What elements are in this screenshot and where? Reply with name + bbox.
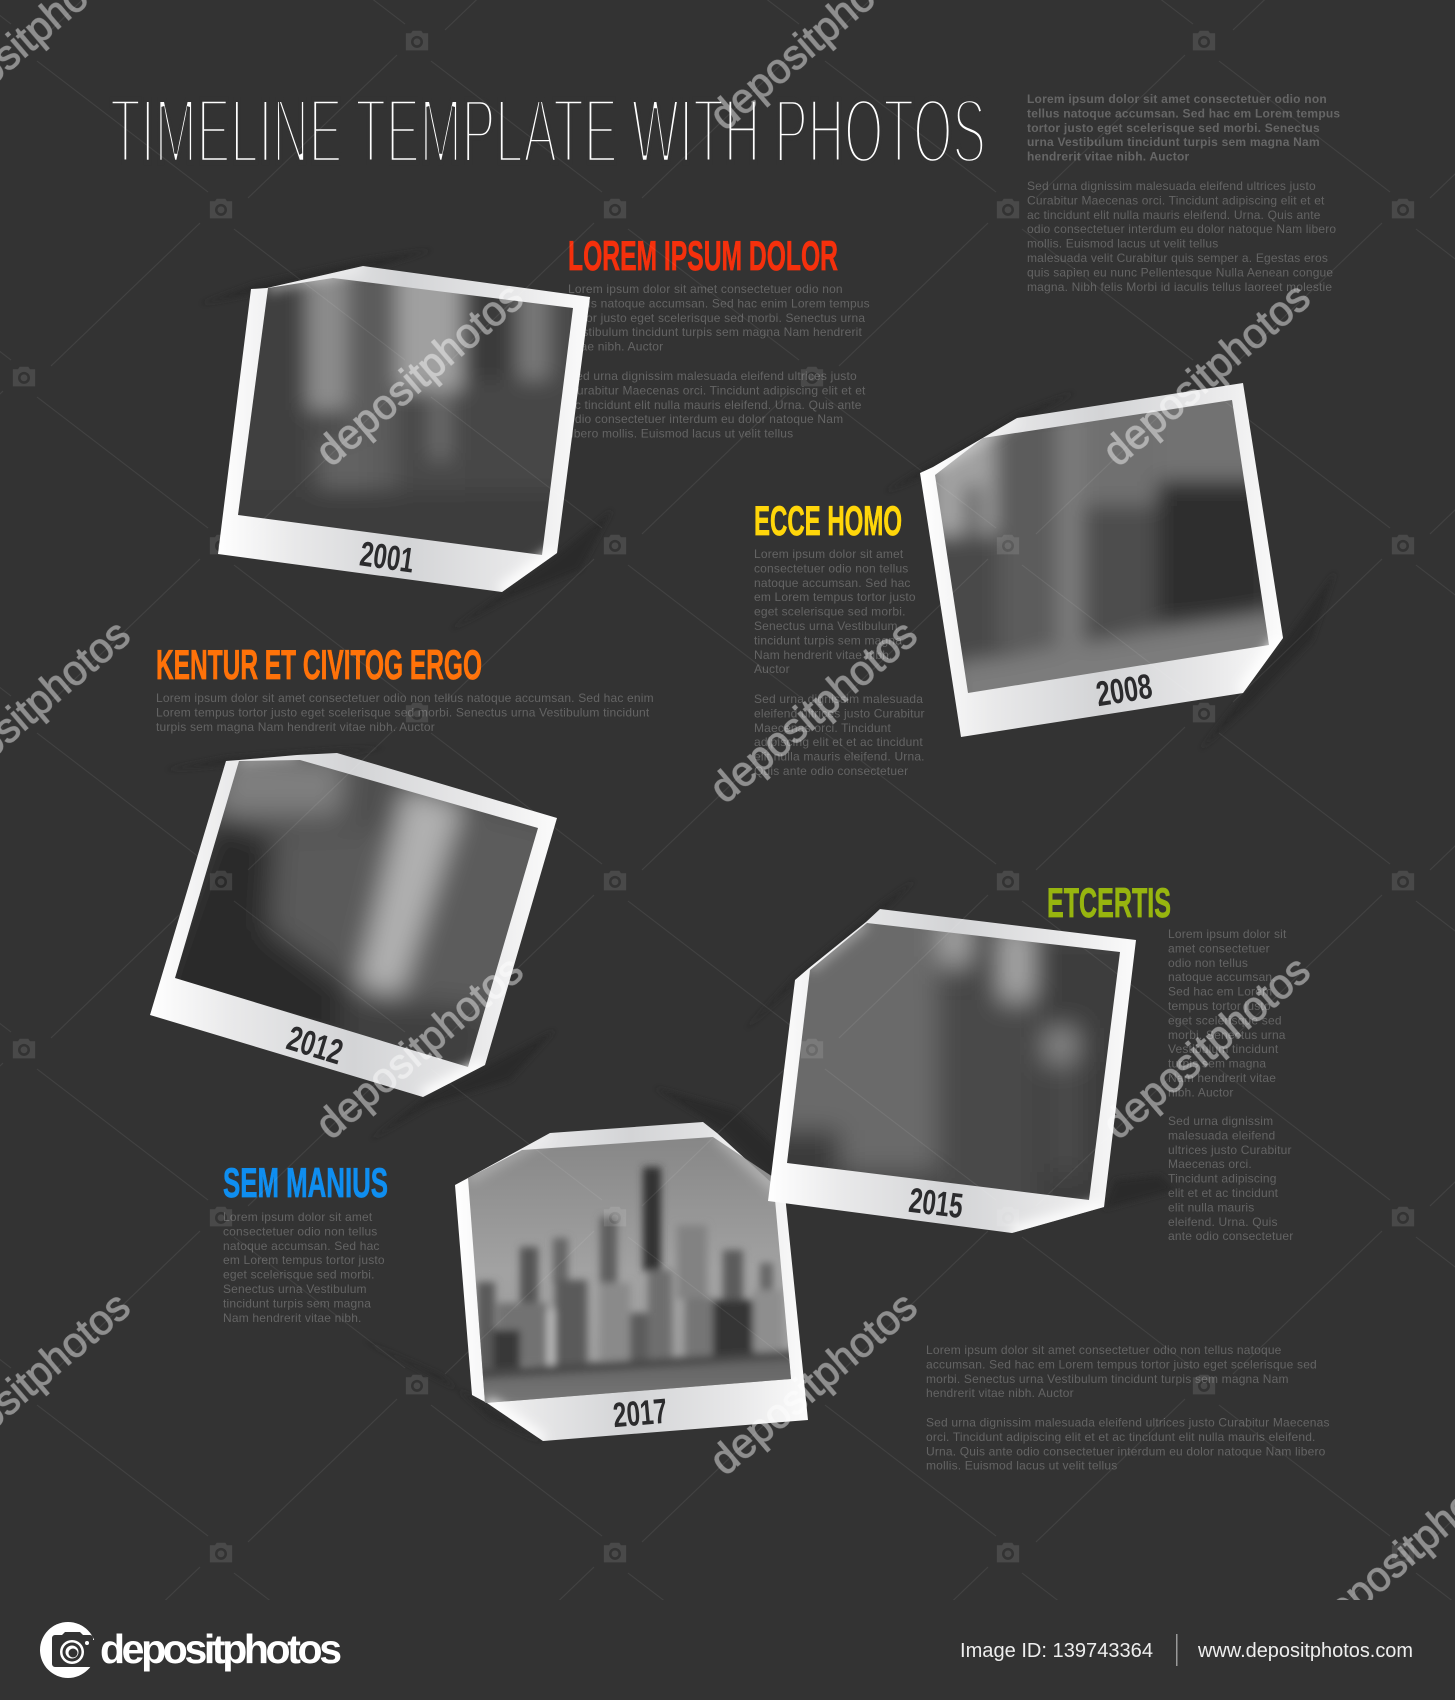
polaroid: 2015 [768,909,1136,1233]
text block: 2008: Auctor [754,662,790,676]
text block: 2017 right: morbi. Senectus urna Vestibulum tincidunt turpis sem magna Nam [926,1372,1289,1386]
watermark pattern: depositphotos [306,946,532,1148]
text block: 2008: eleifend ultrices justo Curabitur [754,706,925,720]
text block: 2008: Nam hendrerit vitae nibh. [754,648,893,662]
polaroid: 2017 [455,1122,808,1441]
watermark pattern: depositphotos [1093,946,1319,1148]
heading: kentur et civitog ergo: KENTUR ET CIVITOG ERGO [156,641,482,688]
text block: 2008: Sed urna dignissim malesuada [754,692,923,706]
text block: 2001 [568,282,870,441]
watermark pattern: depositphotos [306,273,532,475]
intro text block: quis sapien eu nunc Pellentesque Nulla Aenean congue [1027,265,1333,279]
year label: 2015 [907,1181,965,1226]
text block: 2001: Curabitur Maecenas orci. Tincidunt adipiscing elit et et [568,383,866,397]
text block: 2017 right: accumsan. Sed hac em Lorem tempus tortor justo eget scelerisque sed [926,1357,1317,1371]
intro text block: odio consectetuer interdum eu dolor natoque Nam libero [1027,222,1336,236]
text block: 2001: vitae nibh. Auctor [568,340,663,354]
text block: 2017 left: Senectus urna Vestibulum [223,1282,367,1296]
text block: 2015: natoque accumsan. [1168,970,1276,984]
paper slit shadows [165,250,1335,1443]
text block: 2015: odio non tellus [1168,956,1248,970]
text block: 2015: Vestibulum tincidunt [1168,1042,1279,1056]
text block: 2017 right: mollis. Euismod lacus ut velit tellus [926,1459,1117,1473]
text block: 2017 right: hendrerit vitae nibh. Auctor [926,1386,1074,1400]
text block: 2015: Nam hendrerit vitae [1168,1071,1276,1085]
text block: 2017 left: natoque accumsan. Sed hac [223,1239,380,1253]
text block: 2017 left: Lorem ipsum dolor sit amet [223,1210,373,1224]
text block: 2001: tortor justo eget scelerisque sed morbi. Senectus urna [568,311,865,325]
heading: ecce homo: ECCE HOMO [754,497,902,544]
text block: 2001: ac tincidunt elit nulla mauris eleifend. Urna. Quis ante [568,398,862,412]
text block: 2017 left: em Lorem tempus tortor justo [223,1253,385,1267]
text block: 2017 right: Urna. Quis ante odio consectetuer interdum eu dolor natoque Nam libero [926,1444,1326,1458]
text block: 2012: Lorem ipsum dolor sit amet consectetuer odio non tellus natoque accumsan. Sed hac enim [156,691,654,705]
text block: 2017 left: Nam hendrerit vitae nibh. [223,1311,362,1325]
intro text block: tortor justo eget scelerisque sed morbi. Senectus [1027,121,1320,135]
text block: 2015: Lorem ipsum dolor sit [1168,927,1287,941]
text block: 2008: eget scelerisque sed morbi. [754,605,906,619]
text block: 2008: consectetuer odio non tellus [754,561,908,575]
intro text block: urna Vestibulum tincidunt turpis sem magna Nam [1027,135,1320,149]
text block: 2008: Lorem ipsum dolor sit amet [754,547,904,561]
footer logo: depositphotos [100,1626,342,1672]
intro text block: Curabitur Maecenas orci. Tincidunt adipiscing elit et et [1027,193,1325,207]
intro text block: ac tincidunt elit nulla mauris eleifend. Urna. Quis ante [1027,208,1321,222]
text block: 2001: Vestibulum tincidunt turpis sem magna Nam hendrerit [568,325,862,339]
text block: 2015: amet consectetuer [1168,941,1270,955]
text block: 2001: tellus natoque accumsan. Sed hac enim Lorem tempus [568,296,870,310]
text block: 2008: Quis ante odio consectetuer [754,764,908,778]
watermark pattern: depositphotos [700,610,926,812]
year label: 2008 [1093,667,1155,714]
intro text block [1027,92,1340,294]
text block: 2008: elit nulla mauris eleifend. Urna. [754,750,925,764]
year label: 2001 [357,534,416,581]
text block: 2008: natoque accumsan. Sed hac [754,576,911,590]
year label: 2017 [611,1392,669,1435]
text block: 2008: em Lorem tempus tortor justo [754,590,916,604]
text block: 2017 left: consectetuer odio non tellus [223,1224,377,1238]
text block: 2017 right: orci. Tincidunt adipiscing elit et et ac tincidunt elit nulla mauris eleifend. [926,1430,1316,1444]
text block: 2008: Senectus urna Vestibulum [754,619,898,633]
text block: 2015: morbi. Senectus urna [1168,1028,1286,1042]
text block: 2015: elit et et ac tincidunt [1168,1186,1279,1200]
text block: 2008 [754,547,925,778]
text block: 2012: Lorem tempus tortor justo eget scelerisque sed morbi. Senectus urna Vestibulum tincidunt [156,705,650,719]
footer logo [40,1622,342,1678]
text block: 2015: Sed urna dignissim [1168,1114,1273,1128]
intro text block: Sed urna dignissim malesuada eleifend ultrices justo [1027,179,1316,193]
footer website: www.depositphotos.com [1197,1640,1413,1662]
text block: 2008: tincidunt turpis sem magna [754,633,902,647]
heading: sem manius: SEM MANIUS [223,1159,388,1206]
text block: 2015: ante odio consectetuer [1168,1229,1293,1243]
text block: 2015: ultrices justo Curabitur [1168,1143,1292,1157]
intro text block: magna. Nibh felis Morbi id iaculis tellus laoreet molestie [1027,280,1332,294]
polaroid: 2008 [920,383,1283,737]
text block: 2015: eget scelerisque sed [1168,1013,1282,1027]
polaroid: 2001 [218,266,590,592]
text block: 2015: elit nulla mauris [1168,1200,1254,1214]
text block: 2015: turpis sem magna [1168,1057,1266,1071]
text block: 2017 right: Lorem ipsum dolor sit amet consectetuer odio non tellus natoque [926,1343,1282,1357]
text block: 2015: nibh. Auctor [1168,1085,1234,1099]
text block: 2001: Sed urna dignissim malesuada eleifend ultrices justo [568,369,857,383]
text block: 2001: odio consectetuer interdum eu dolor natoque Nam [568,412,843,426]
intro text block: tellus natoque accumsan. Sed hac em Lorem tempus [1027,106,1340,120]
text block: 2017 left: tincidunt turpis sem magna [223,1296,371,1310]
text block: 2008: adipiscing elit et et ac tincidunt [754,735,923,749]
year label: 2012 [282,1019,347,1072]
heading: lorem ipsum dolor: LOREM IPSUM DOLOR [568,232,838,279]
text block: 2001: libero mollis. Euismod lacus ut velit tellus [568,427,793,441]
text block: 2015: tempus tortor justo [1168,999,1271,1013]
watermark pattern: depositphotos [1093,273,1319,475]
footer image id: Image ID: 139743364 [960,1640,1153,1662]
intro text block: malesuada velit Curabitur quis semper a. Egestas eros [1027,251,1328,265]
heading: etcertis: ETCERTIS [1047,879,1171,926]
intro text block: Lorem ipsum dolor sit amet consectetuer odio non [1027,92,1327,106]
watermark pattern: depositphotos [700,1282,926,1484]
text block: 2017 right [926,1343,1330,1473]
text block: 2001: Lorem ipsum dolor sit amet consectetuer odio non [568,282,843,296]
text block: 2015: malesuada eleifend [1168,1128,1275,1142]
text block: 2015: Tincidunt adipiscing [1168,1172,1277,1186]
text block: 2015 [1168,927,1293,1243]
intro text block: mollis. Euismod lacus ut velit tellus [1027,237,1218,251]
text block: 2008: Maecenas orci. Tincidunt [754,721,892,735]
polaroid: 2012 [150,753,557,1097]
intro text block: hendrerit vitae nibh. Auctor [1027,150,1190,164]
text block: 2015: eleifend. Urna. Quis [1168,1215,1278,1229]
text block: 2017 right: Sed urna dignissim malesuada eleifend ultrices justo Curabitur Maecenas [926,1416,1330,1430]
text block: 2015: Maecenas orci. [1168,1157,1252,1171]
text block: 2012: turpis sem magna Nam hendrerit vitae nibh. Auctor [156,720,435,734]
text block: 2015: Sed hac em Lorem [1168,985,1272,999]
text block: 2017 left: eget scelerisque sed morbi. [223,1268,375,1282]
